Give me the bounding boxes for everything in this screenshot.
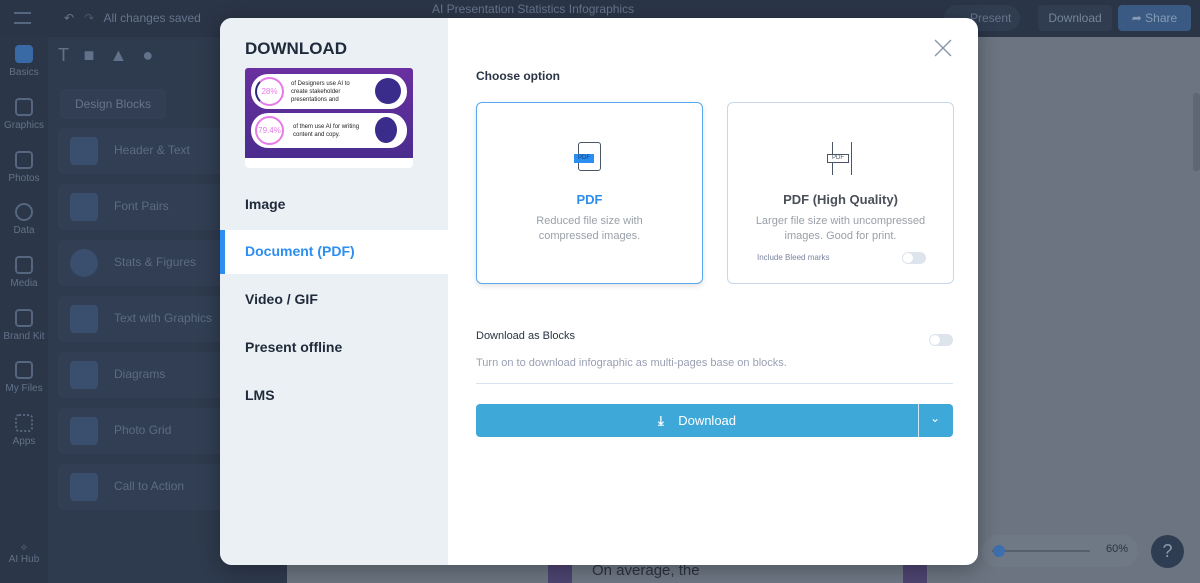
bleed marks toggle: Include Bleed marks xyxy=(757,253,829,262)
icon: pdf file: PDF xyxy=(578,155,590,161)
card: text with graphics xyxy=(58,296,287,342)
card: photo grid xyxy=(58,408,287,454)
present button xyxy=(944,5,1020,31)
rail: photos xyxy=(8,151,40,184)
icon: pdf file xyxy=(578,142,601,171)
top bar xyxy=(0,0,1200,37)
card: font pairs: Font Pairs xyxy=(114,199,169,213)
option: pdf: PDF xyxy=(576,192,602,207)
nav: lms: LMS xyxy=(245,387,275,403)
nav: image: Image xyxy=(245,196,285,212)
preview thumbnail: 28% xyxy=(261,87,278,96)
rail: brand kit: Brand Kit xyxy=(3,331,45,342)
option: pdf high quality: Larger file size with uncompressed xyxy=(756,215,925,227)
download top button: Download xyxy=(1048,11,1102,25)
card: font pairs xyxy=(58,184,287,230)
preview thumbnail: of them use AI for writing content and copy. xyxy=(293,124,359,138)
menu icon xyxy=(14,12,31,24)
card: stats: Stats & Figures xyxy=(114,255,196,269)
side panel xyxy=(48,37,287,583)
rail: apps: Apps xyxy=(13,436,35,447)
rail: graphics xyxy=(4,98,44,131)
download button xyxy=(476,404,953,437)
undo and save status: ↶ ↷ All changes saved xyxy=(64,11,201,25)
nav: document pdf (active) xyxy=(220,230,448,274)
rail: data: Data xyxy=(13,225,35,236)
download top button xyxy=(1038,5,1112,31)
nav: video gif: Video / GIF xyxy=(245,291,318,307)
design blocks tab xyxy=(60,89,166,119)
card: header & text xyxy=(58,128,287,174)
rail: my files: My Files xyxy=(5,383,43,394)
choose option heading: Choose option xyxy=(476,69,560,83)
zoom control xyxy=(982,535,1138,567)
card: text with graphics: Text with Graphics xyxy=(114,311,212,325)
card: header & text: Header & Text xyxy=(114,143,190,157)
preview thumbnail xyxy=(245,68,413,168)
help button xyxy=(1151,535,1184,568)
option: pdf high quality: PDF (High Quality) xyxy=(783,192,898,207)
document title: AI Presentation Statistics Infographics xyxy=(432,2,634,16)
rail: brand kit xyxy=(3,309,45,342)
icon: pdf bleed: PDF xyxy=(832,155,844,161)
share button: ➦ Share xyxy=(1132,11,1177,25)
rail: data xyxy=(13,203,35,236)
card: diagrams: Diagrams xyxy=(114,367,165,381)
nav: present offline: Present offline xyxy=(245,339,342,355)
card: stats xyxy=(58,240,287,286)
canvas peek text: On average, the xyxy=(592,562,700,579)
card: call to action: Call to Action xyxy=(114,479,184,493)
help button: ? xyxy=(1162,541,1172,561)
option: pdf high quality xyxy=(727,102,954,284)
preview thumbnail: 79.4% xyxy=(258,126,281,135)
rail: graphics: Graphics xyxy=(4,120,44,131)
tools row: T ■ ▲ ● xyxy=(58,45,153,65)
icon rail xyxy=(0,37,48,583)
download button: ⤓ Download xyxy=(658,413,736,428)
rail: photos: Photos xyxy=(8,173,40,184)
rail: media: Media xyxy=(10,278,38,289)
card: diagrams xyxy=(58,352,287,398)
option: pdf: compressed images. xyxy=(539,230,640,242)
option: pdf high quality: images. Good for print. xyxy=(785,230,896,242)
rail: media xyxy=(10,256,38,289)
blocks description: Turn on to download infographic as multi-pages base on blocks. xyxy=(476,357,787,369)
modal title: DOWNLOAD xyxy=(245,39,347,58)
nav: document pdf (active): Document (PDF) xyxy=(245,243,355,259)
rail: my files xyxy=(5,361,43,394)
rail: ai hub xyxy=(8,543,39,565)
download as blocks: Download as Blocks xyxy=(476,330,575,342)
present button: Present xyxy=(970,11,1011,25)
design blocks tab: Design Blocks xyxy=(75,97,151,111)
card: photo grid: Photo Grid xyxy=(114,423,171,437)
zoom control: 60% xyxy=(1106,543,1128,555)
modal sidebar xyxy=(220,18,448,565)
card: call to action xyxy=(58,464,287,510)
option: pdf: Reduced file size with xyxy=(536,215,643,227)
download button: ⌄ xyxy=(930,411,940,425)
canvas peek text xyxy=(548,565,928,583)
rail: basics xyxy=(9,45,39,78)
rail: ai hub: ✧ xyxy=(20,543,28,554)
download modal xyxy=(220,18,978,565)
icon: pdf bleed xyxy=(832,142,852,175)
rail: basics: Basics xyxy=(9,67,39,78)
option: pdf xyxy=(476,102,703,284)
preview thumbnail: of Designers use AI to create stakeholder presentations and xyxy=(291,81,350,103)
share button xyxy=(1118,5,1191,31)
scrollbar xyxy=(1193,93,1200,171)
rail: apps xyxy=(12,414,35,447)
close icon xyxy=(934,40,952,56)
rail: ai hub: AI Hub xyxy=(9,554,39,565)
